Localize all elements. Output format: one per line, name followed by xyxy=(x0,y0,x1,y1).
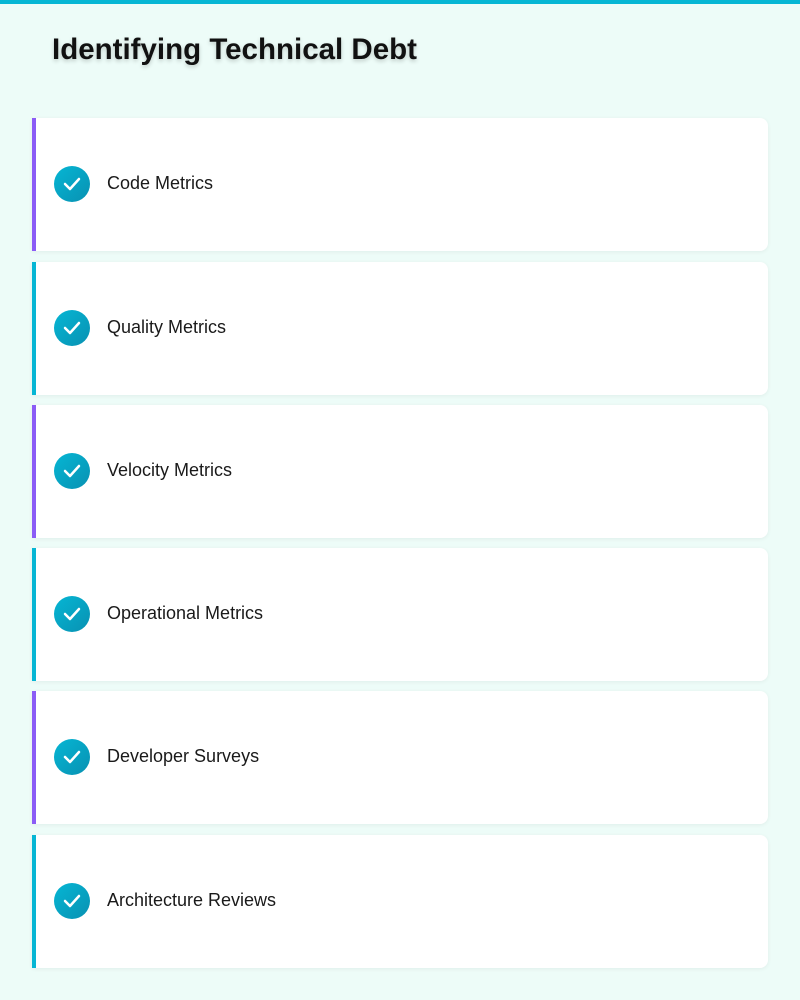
icon: check xyxy=(54,883,90,919)
card: operational metrics xyxy=(32,548,768,681)
icon: check xyxy=(54,310,90,346)
label: Velocity Metrics xyxy=(107,460,232,480)
label: Operational Metrics xyxy=(107,603,263,623)
card: architecture reviews xyxy=(32,835,768,968)
icon: check xyxy=(54,596,90,632)
icon: check xyxy=(54,453,90,489)
card: developer surveys xyxy=(32,691,768,824)
label: Code Metrics xyxy=(107,173,213,193)
label: Architecture Reviews xyxy=(107,890,276,910)
icon: check xyxy=(54,166,90,202)
card: quality metrics xyxy=(32,262,768,395)
label: Developer Surveys xyxy=(107,746,259,766)
title: Identifying Technical Debt xyxy=(52,33,417,66)
card: code metrics xyxy=(32,118,768,251)
card: velocity metrics xyxy=(32,405,768,538)
label: Quality Metrics xyxy=(107,317,226,337)
icon: check xyxy=(54,739,90,775)
